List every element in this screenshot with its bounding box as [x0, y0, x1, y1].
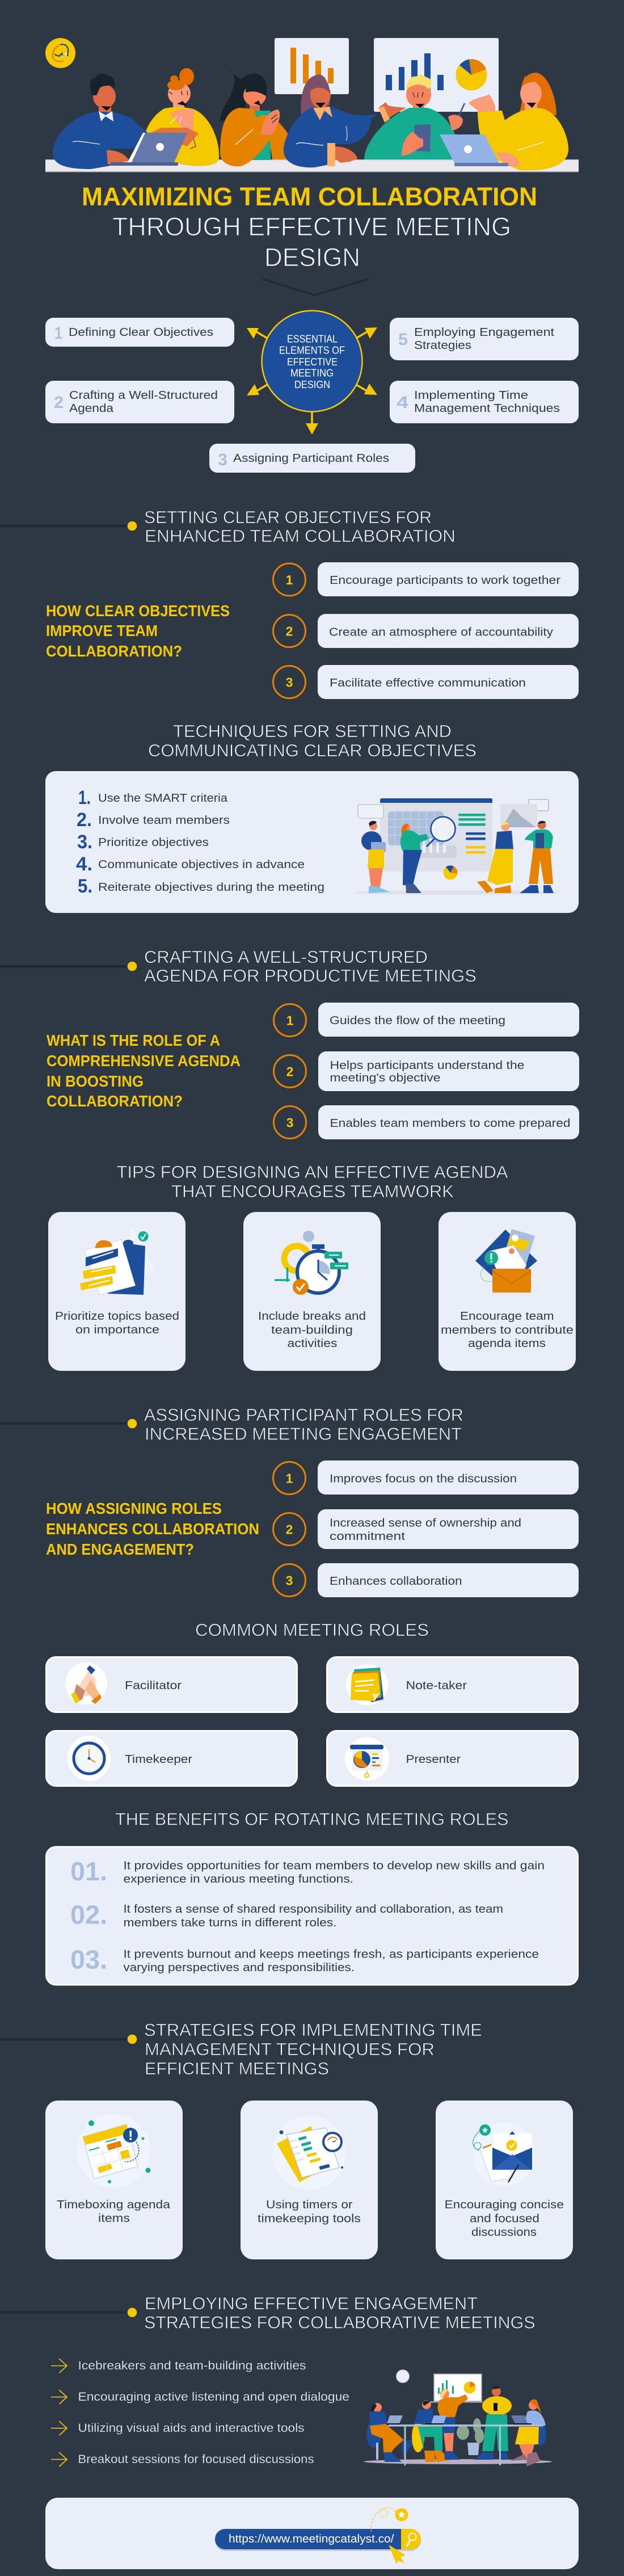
- numbered list: roles: Enhances collaboration: [330, 1575, 462, 1588]
- card: timers: timekeeping tools: [258, 2213, 361, 2225]
- panel: techniques list: Involve team members: [98, 814, 230, 827]
- section heading: engagement: STRATEGIES FOR COLLABORATIVE MEETINGS: [144, 2313, 536, 2332]
- card: note-taker: Note-taker: [406, 1680, 467, 1692]
- panel: benefits: [47, 1847, 577, 1985]
- element 3: [209, 444, 415, 473]
- panel: techniques list: 3.: [77, 831, 92, 853]
- numbered list: clear objectives: 3: [286, 675, 293, 690]
- panel: techniques list: Use the SMART criteria: [98, 792, 228, 805]
- numbered list: agenda: Helps participants understand the: [330, 1059, 524, 1072]
- person 5: green sweater, blond hair: [364, 74, 465, 159]
- person seated centre: [412, 2400, 450, 2462]
- section heading: agenda: CRAFTING A WELL-STRUCTURED: [144, 947, 428, 967]
- numbered list: roles: Increased sense of ownership and: [330, 1517, 521, 1530]
- url search bar: https://www.meetingcatalyst.co/: [229, 2533, 394, 2545]
- panel: essential elements diagram: [45, 311, 579, 473]
- card: facilitator: Facilitator: [125, 1680, 182, 1692]
- section heading: engagement: EMPLOYING EFFECTIVE ENGAGEMENT: [145, 2293, 478, 2313]
- hero illustration: team meeting: [45, 38, 579, 172]
- element 5: Strategies: [414, 339, 471, 352]
- icon: presentation board: [345, 1737, 389, 1781]
- card: timers: Using timers or: [266, 2199, 353, 2211]
- numbered list: roles: commitment: [330, 1530, 406, 1543]
- section heading: setting clear objectives: [0, 507, 456, 546]
- heading: techniques: [148, 721, 477, 760]
- card: presenter: Presenter: [406, 1753, 461, 1766]
- chart board left: [275, 38, 349, 94]
- card: timekeeper: [47, 1731, 297, 1786]
- icon: email check: [473, 2123, 535, 2186]
- question: roles: [46, 1500, 259, 1558]
- numbered list: roles: Improves focus on the discussion: [330, 1473, 517, 1485]
- central circle: ESSENTIAL: [287, 332, 338, 345]
- section heading: time management: MANAGEMENT TECHNIQUES FOR: [145, 2039, 435, 2059]
- panel: techniques list: Reiterate objectives during the meeting: [98, 881, 324, 894]
- numbered list: agenda: [273, 1003, 579, 1139]
- laptop left: [111, 133, 187, 166]
- illustration: team discussion around table: [364, 2369, 552, 2466]
- panel: techniques list: 4.: [76, 853, 92, 875]
- panel: techniques list: Communicate objectives in advance: [98, 858, 305, 871]
- person 3: orange jacket, dark hair: [220, 70, 289, 166]
- element 2: Agenda: [69, 402, 114, 415]
- numbered list: agenda: 3: [286, 1116, 293, 1130]
- heading: tips: [117, 1162, 508, 1201]
- element 2: Crafting a Well-Structured: [69, 389, 218, 402]
- central circle: EFFECTIVE: [287, 356, 338, 368]
- person 6: yellow sweater, orange hair: [469, 73, 568, 170]
- laptop right: [440, 134, 508, 166]
- question: roles: HOW ASSIGNING ROLES: [46, 1500, 222, 1517]
- element 4: [390, 381, 579, 423]
- person standing in orange: [438, 2389, 468, 2460]
- person 2: yellow sweater, orange hair: [144, 68, 219, 166]
- card: concise discussions: and focused: [470, 2213, 539, 2225]
- question: clear objectives: COLLABORATION?: [46, 642, 182, 660]
- card: timeboxing: items: [98, 2212, 130, 2225]
- card: include breaks: Include breaks and: [258, 1310, 366, 1323]
- section heading: agenda: AGENDA FOR PRODUCTIVE MEETINGS: [144, 966, 477, 986]
- card: timeboxing: [45, 2101, 183, 2259]
- card: concise discussions: [436, 2101, 573, 2259]
- panel: benefits: 03.: [70, 1945, 107, 1975]
- numbered list: clear objectives: 2: [286, 624, 293, 639]
- numbered list: roles: [273, 1460, 579, 1597]
- element 3: Assigning Participant Roles: [233, 452, 389, 465]
- list: engagement strategies: [51, 2359, 349, 2466]
- numbered list: agenda: meeting's objective: [330, 1072, 440, 1084]
- card: encourage team members: [439, 1212, 576, 1371]
- title: MAXIMIZING TEAM COLLABORATION: [82, 182, 537, 211]
- question: clear objectives: IMPROVE TEAM: [46, 622, 158, 639]
- question: roles: ENHANCES COLLABORATION: [46, 1520, 259, 1538]
- icon: clock: [68, 1736, 111, 1781]
- title: DESIGN: [264, 243, 360, 272]
- element 5: [390, 318, 579, 360]
- card: encourage team members: members to contribute: [441, 1324, 574, 1337]
- icon: hands: [65, 1662, 107, 1704]
- card: timekeeper: Timekeeper: [125, 1753, 192, 1766]
- card: prioritize topics: Prioritize topics based: [55, 1310, 179, 1323]
- element 4: 4: [397, 393, 408, 412]
- card: encourage team members: Encourage team: [460, 1310, 554, 1323]
- person standing in yellow: [474, 2386, 512, 2460]
- numbered list: agenda: Enables team members to come prepared: [330, 1117, 571, 1130]
- numbered list: roles: 3: [286, 1573, 293, 1588]
- person in blue and yellow pants: [477, 822, 513, 893]
- numbered list: clear objectives: Facilitate effective communication: [330, 677, 526, 689]
- illustration: people at dashboard: [354, 798, 559, 895]
- icon: clipboard: [80, 1226, 156, 1295]
- section heading: participant roles: [0, 1405, 463, 1443]
- url search bar: [215, 2529, 421, 2551]
- numbered list: clear objectives: Create an atmosphere of accountability: [329, 626, 553, 639]
- panel: benefits: It fosters a sense of shared responsibility and collaboration, as team: [124, 1903, 503, 1916]
- panel: benefits: 02.: [70, 1900, 107, 1929]
- card: include breaks: [243, 1212, 381, 1371]
- logo: [45, 38, 75, 68]
- panel: techniques list: 5.: [78, 875, 92, 897]
- panel: techniques list: 1.: [78, 787, 91, 809]
- card: timers: [241, 2101, 378, 2259]
- element 1: 1: [54, 324, 62, 343]
- question: clear objectives: HOW CLEAR OBJECTIVES: [46, 602, 230, 620]
- arrow item 1: Icebreakers and team-building activities: [78, 2359, 306, 2372]
- panel: website link: [45, 2498, 579, 2569]
- element 5: 5: [398, 330, 408, 349]
- person in green and orange: [520, 820, 554, 893]
- section heading: time management: EFFICIENT MEETINGS: [145, 2059, 329, 2078]
- question: agenda: [47, 1032, 241, 1110]
- numbered list: roles: 2: [286, 1522, 293, 1537]
- numbered list: clear objectives: Encourage participants to work together: [330, 574, 560, 587]
- panel: benefits: It prevents burnout and keeps meetings fresh, as participants experience: [124, 1948, 539, 1961]
- icon: calendar: [77, 2114, 151, 2188]
- section heading: time management: STRATEGIES FOR IMPLEMENTING TIME: [144, 2020, 482, 2040]
- numbered list: agenda: 1: [286, 1013, 294, 1028]
- section heading: participant roles: INCREASED MEETING ENGAGEMENT: [145, 1424, 462, 1443]
- arrow item 2: Encouraging active listening and open dialogue: [78, 2390, 349, 2404]
- card: concise discussions: discussions: [471, 2226, 537, 2239]
- title: [82, 182, 537, 272]
- element 2: 2: [54, 393, 64, 412]
- element 3: 3: [218, 451, 227, 469]
- card: prioritize topics: on importance: [75, 1324, 159, 1336]
- question: agenda: IN BOOSTING: [47, 1072, 144, 1090]
- element 5: Employing Engagement: [414, 326, 555, 339]
- panel: techniques list: Prioritize objectives: [98, 836, 209, 849]
- numbered list: clear objectives: 1: [286, 573, 293, 587]
- table: [45, 159, 579, 172]
- element 4: Management Techniques: [414, 402, 560, 415]
- card: facilitator: [47, 1657, 297, 1712]
- panel: benefits: It provides opportunities for team members to develop new skills and gain: [124, 1860, 545, 1872]
- heading: techniques: TECHNIQUES FOR SETTING AND: [173, 721, 452, 741]
- numbered list: agenda: 2: [286, 1064, 293, 1079]
- card: timeboxing: Timeboxing agenda: [57, 2199, 171, 2211]
- central circle: DESIGN: [294, 378, 330, 390]
- person in blue and yellow: [361, 821, 390, 893]
- icon: timer and document: [272, 2116, 346, 2190]
- icon: envelope: [475, 1229, 537, 1293]
- arrow item 3: Utilizing visual aids and interactive tools: [78, 2422, 304, 2435]
- element 1: [45, 318, 234, 347]
- icon: stopwatch: [275, 1231, 348, 1295]
- central circle: ELEMENTS OF: [279, 344, 345, 356]
- panel: benefits: varying perspectives and responsibilities.: [124, 1962, 355, 1974]
- heading: tips: TIPS FOR DESIGNING AN EFFECTIVE AGENDA: [117, 1162, 508, 1182]
- question: agenda: WHAT IS THE ROLE OF A: [47, 1032, 220, 1049]
- person 4: blue sweater, purple hair: [284, 75, 406, 167]
- card: encourage team members: agenda items: [468, 1337, 546, 1350]
- icon: notes: [346, 1664, 388, 1705]
- central circle: MEETING: [290, 367, 334, 379]
- element 1: Defining Clear Objectives: [69, 326, 213, 339]
- section heading: agenda: [0, 947, 477, 986]
- element 4: Implementing Time: [414, 389, 528, 402]
- panel: benefits: experience in various meeting functions.: [124, 1873, 353, 1885]
- heading: techniques: COMMUNICATING CLEAR OBJECTIVES: [148, 740, 477, 760]
- person in green and blue: [400, 824, 429, 893]
- card: presenter: [327, 1731, 577, 1786]
- person 1: blue sweater, dark hair: [53, 74, 199, 169]
- card: include breaks: team-building: [271, 1324, 353, 1337]
- panel: benefits: 01.: [70, 1857, 107, 1886]
- arrow item 4: Breakout sessions for focused discussions: [78, 2453, 314, 2466]
- title: THROUGH EFFECTIVE MEETING: [112, 212, 511, 241]
- numbered list: roles: 1: [286, 1471, 293, 1485]
- table and laptops: [387, 2415, 543, 2465]
- section heading: engagement: [0, 2293, 536, 2332]
- card: prioritize topics: [48, 1212, 185, 1371]
- section heading: setting clear objectives: SETTING CLEAR OBJECTIVES FOR: [144, 507, 432, 527]
- question: agenda: COLLABORATION?: [47, 1092, 183, 1110]
- person seated left: [366, 2403, 416, 2462]
- question: clear objectives: [46, 602, 230, 660]
- chart board right: [374, 38, 499, 112]
- heading: common roles: COMMON MEETING ROLES: [195, 1620, 429, 1640]
- numbered list: clear objectives: [273, 562, 579, 699]
- icon: cursor and star badge: [371, 2507, 408, 2564]
- panel: techniques list: [45, 771, 579, 913]
- card: concise discussions: Encouraging concise: [445, 2199, 564, 2211]
- card: include breaks: activities: [287, 1337, 337, 1350]
- heading: benefits: THE BENEFITS OF ROTATING MEETING ROLES: [115, 1809, 508, 1829]
- heading: tips: THAT ENCOURAGES TEAMWORK: [171, 1181, 454, 1201]
- central circle: [262, 311, 362, 412]
- panel: techniques list: 2.: [77, 809, 92, 831]
- section heading: time management: [0, 2020, 482, 2078]
- section heading: participant roles: ASSIGNING PARTICIPANT ROLES FOR: [144, 1405, 463, 1425]
- question: agenda: COMPREHENSIVE AGENDA: [47, 1052, 241, 1070]
- numbered list: agenda: Guides the flow of the meeting: [330, 1015, 505, 1027]
- element 2: [45, 381, 234, 423]
- card: note-taker: [327, 1657, 577, 1712]
- section heading: setting clear objectives: ENHANCED TEAM COLLABORATION: [145, 526, 456, 546]
- arrows from circle: [247, 327, 377, 435]
- plant: [457, 2418, 484, 2455]
- person seated right: [510, 2400, 546, 2466]
- panel: benefits: members take turns in different roles.: [124, 1917, 337, 1929]
- question: roles: AND ENGAGEMENT?: [46, 1540, 194, 1558]
